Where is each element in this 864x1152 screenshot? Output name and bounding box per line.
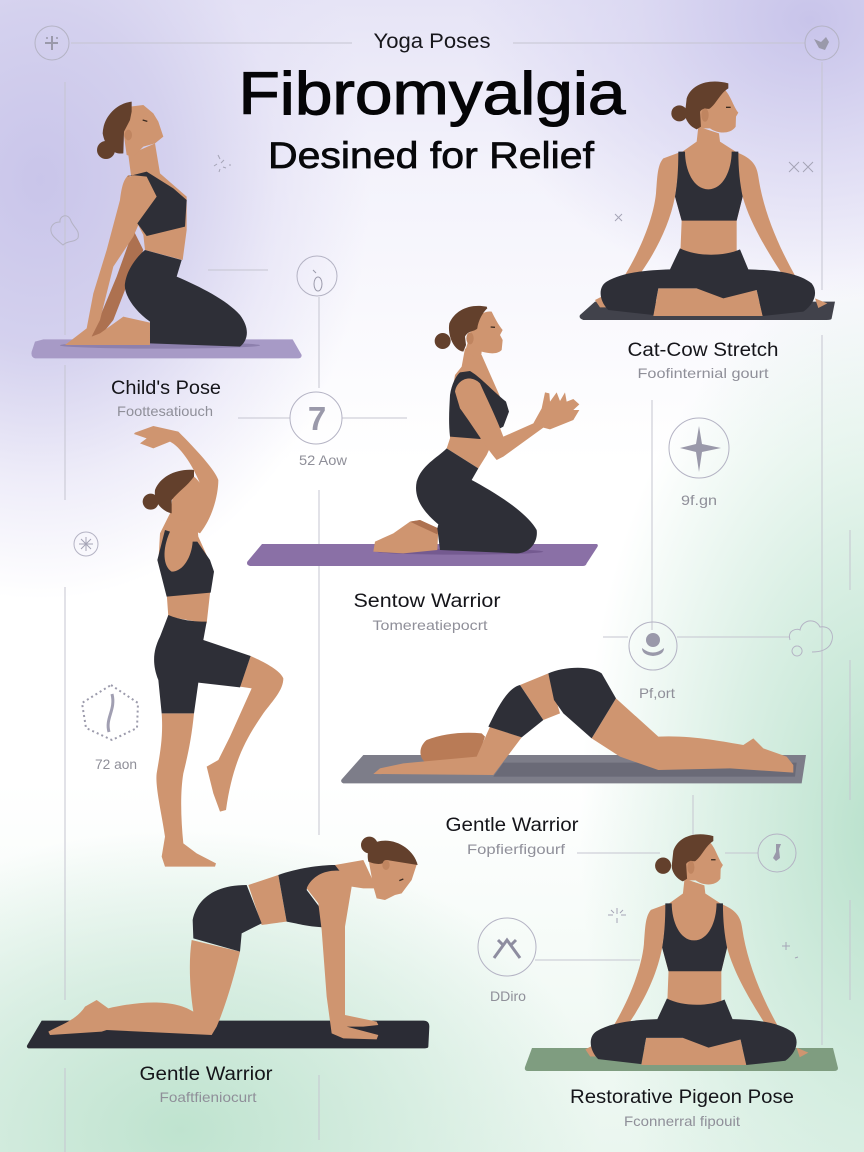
icon: figure circle right: [758, 834, 796, 872]
caption: star icon: 9f.gn: [681, 492, 717, 508]
icon: cloud outline left: [51, 216, 78, 245]
mat: dark: [27, 1021, 429, 1048]
pose: standing knee raise: [134, 426, 283, 867]
caption: Cat-Cow Stretch: Foofinternial gourt: [638, 365, 769, 381]
mat: purple: [247, 544, 598, 566]
icon: top-right bird circle: [805, 26, 839, 60]
icon: sparkle near seated figure: [608, 908, 798, 958]
pose: Child's Pose kneeling back-bend: [31, 102, 302, 358]
label: Sentow Warrior: Sentow Warrior: [354, 591, 501, 612]
mat: lavender: [31, 339, 302, 358]
label: Gentle Warrior bottom: Gentle Warrior: [140, 1064, 273, 1085]
icon: cross marks top right: [615, 162, 813, 221]
icon: small sparkle near title: [214, 155, 231, 172]
subtitle: Desined for Relief: [268, 135, 595, 176]
label: Child's Pose: Child's Pose: [111, 378, 221, 399]
caption: Sentow Warrior: Tomereatiepocrt: [372, 617, 488, 633]
pose: Cat-Cow seated: [580, 81, 835, 320]
icon: lotus circle: [478, 918, 536, 976]
icon: dotted spine circle: [82, 685, 138, 740]
caption: DDiro: DDiro: [490, 988, 526, 1004]
icon: pose circle near first mat: [297, 256, 337, 296]
label: Gentle Warrior middle: Gentle Warrior: [446, 815, 579, 836]
caption: Gentle Warrior bottom: Foaftfieniocurt: [160, 1089, 257, 1105]
pose: Pigeon forward fold: [341, 668, 806, 783]
mat: charcoal: [580, 302, 835, 320]
caption: 72 aon: 72 aon: [95, 756, 137, 772]
label: Cat-Cow Stretch: Cat-Cow Stretch: [628, 340, 778, 361]
caption: 52 Aow: 52 Aow: [299, 452, 348, 468]
icon: number seven circle: [290, 392, 342, 444]
pose: Sentow Warrior kneeling: [247, 306, 598, 566]
title: Fibromyalgia: [238, 60, 626, 127]
icon: pose circle right: [629, 622, 677, 670]
pose: Restorative Pigeon seated: [525, 834, 838, 1071]
icon: star circle: [669, 418, 729, 478]
pose: Gentle Warrior on all fours: [27, 837, 429, 1048]
mat: green: [525, 1048, 838, 1071]
mat: grey: [341, 755, 806, 783]
caption: Child's Pose: Foottesatiouch: [117, 403, 213, 419]
icon: top-left sparkle circle: [35, 26, 69, 60]
caption: Pfort: Pf,ort: [639, 685, 675, 701]
icon: cloud swirl right: [789, 621, 832, 656]
label: Restorative Pigeon Pose: Restorative Pigeon Pose: [570, 1087, 794, 1108]
caption: Restorative Pigeon Pose: Fconnerral fipouit: [624, 1113, 740, 1129]
eyebrow: Yoga Poses: Yoga Poses: [374, 30, 490, 53]
icon: number seven circle: 7: [308, 400, 326, 437]
icon: asterisk circle: [74, 532, 98, 556]
caption: Gentle Warrior middle: Fopfierfigourf: [467, 841, 565, 857]
